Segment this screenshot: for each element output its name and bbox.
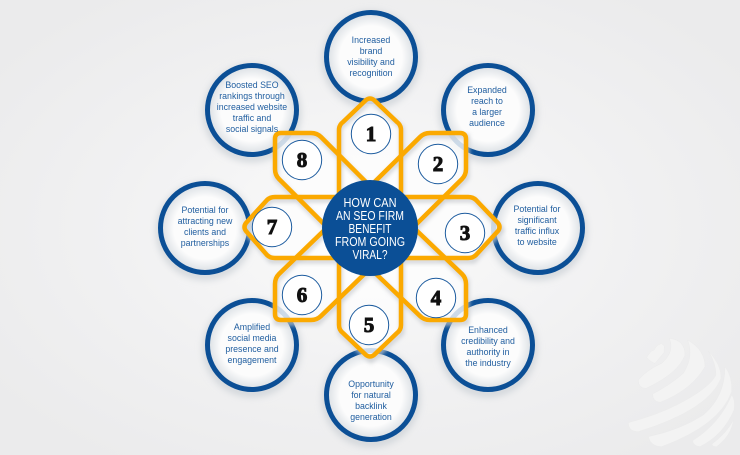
text: benefit 1: brand <box>360 46 382 56</box>
number badge 6: 6 <box>297 283 307 307</box>
text: benefit 2: reach to <box>471 96 503 106</box>
text: benefit 7: attracting new <box>178 216 233 226</box>
text: benefit 2: audience <box>469 118 505 128</box>
text: benefit 2: Expanded <box>467 85 507 95</box>
text: benefit 2 <box>467 85 507 128</box>
text: benefit 7 <box>178 205 233 248</box>
center heading circle: VIRAL? <box>352 247 388 262</box>
number badge 2: 2 <box>433 152 443 176</box>
text: benefit 3: traffic influx <box>515 226 560 236</box>
text: benefit 3: to website <box>517 237 557 247</box>
number badge 4: 4 <box>431 286 442 310</box>
orange petals <box>244 98 500 356</box>
outer circle: upper right <box>444 66 532 154</box>
text: benefit 6: Amplified <box>234 322 270 332</box>
text: benefit 1: recognition <box>349 68 393 78</box>
text: benefit 2: a larger <box>472 107 502 117</box>
number badge 1 <box>351 114 391 154</box>
text: benefit 5: for natural <box>351 390 391 400</box>
text: benefit 4: credibility and <box>461 336 515 346</box>
number badge 5 <box>349 305 389 345</box>
number badge 3 <box>445 213 485 253</box>
center heading circle: FROM GOING <box>335 234 405 249</box>
outer circle: lower left <box>208 300 296 390</box>
text: benefit 1: visibility and <box>347 57 395 67</box>
number badge 8 <box>282 140 322 180</box>
text: benefit 5 <box>348 379 394 422</box>
text: benefit 7: partnerships <box>181 238 230 248</box>
number badge 3: 3 <box>460 221 470 245</box>
outer circle: top <box>326 12 416 102</box>
watermark globe <box>628 338 734 447</box>
outer circle: upper left <box>208 66 296 154</box>
center heading circle: HOW CAN <box>344 195 396 210</box>
center heading circle: AN SEO FIRM <box>336 208 404 223</box>
text: benefit 6 <box>225 322 279 365</box>
text: benefit 4: authority in <box>466 347 510 357</box>
outer circle: lower right <box>444 300 532 390</box>
outer circle: left <box>160 184 250 272</box>
text: benefit 4 <box>461 325 515 368</box>
text: benefit 4: the industry <box>465 358 511 368</box>
text: benefit 8: rankings through <box>219 91 285 101</box>
text: benefit 4: Enhanced <box>468 325 508 335</box>
text: benefit 3: significant <box>517 215 557 225</box>
text: benefit 3: Potential for <box>514 204 561 214</box>
text: benefit 5: generation <box>350 412 392 422</box>
text: benefit 1 <box>347 35 395 78</box>
circle shadows <box>160 15 583 443</box>
text: benefit 8: Boosted SEO <box>225 80 279 90</box>
number badge 8: 8 <box>297 148 307 172</box>
text: benefit 6: social media <box>228 333 277 343</box>
text: benefit 5: backlink <box>355 401 387 411</box>
outer circle: right <box>494 184 582 272</box>
text: benefit 7: Potential for <box>182 205 229 215</box>
center heading circle <box>322 180 418 276</box>
text: benefit 3 <box>514 204 561 247</box>
text: benefit 7: clients and <box>184 227 226 237</box>
number badge 5: 5 <box>364 313 374 337</box>
number badge 2 <box>418 144 458 184</box>
text: benefit 1: Increased <box>352 35 390 45</box>
text: benefit 8: social signals <box>226 124 279 134</box>
number badge 1: 1 <box>366 122 376 146</box>
text: benefit 5: Opportunity <box>348 379 394 389</box>
outer circle: bottom <box>326 350 416 440</box>
text: benefit 6: engagement <box>228 355 277 365</box>
petal fill and shadow <box>243 97 502 361</box>
number badge 6 <box>282 275 322 315</box>
text: benefit 6: presence and <box>225 344 279 354</box>
number badge 4 <box>416 278 456 318</box>
text: benefit 8: traffic and <box>233 113 271 123</box>
text: benefit 8: increased website <box>217 102 287 112</box>
number badge 7: 7 <box>267 215 277 239</box>
text: benefit 8 <box>217 80 287 134</box>
number badge 7 <box>252 207 292 247</box>
center heading circle: BENEFIT <box>348 221 392 236</box>
